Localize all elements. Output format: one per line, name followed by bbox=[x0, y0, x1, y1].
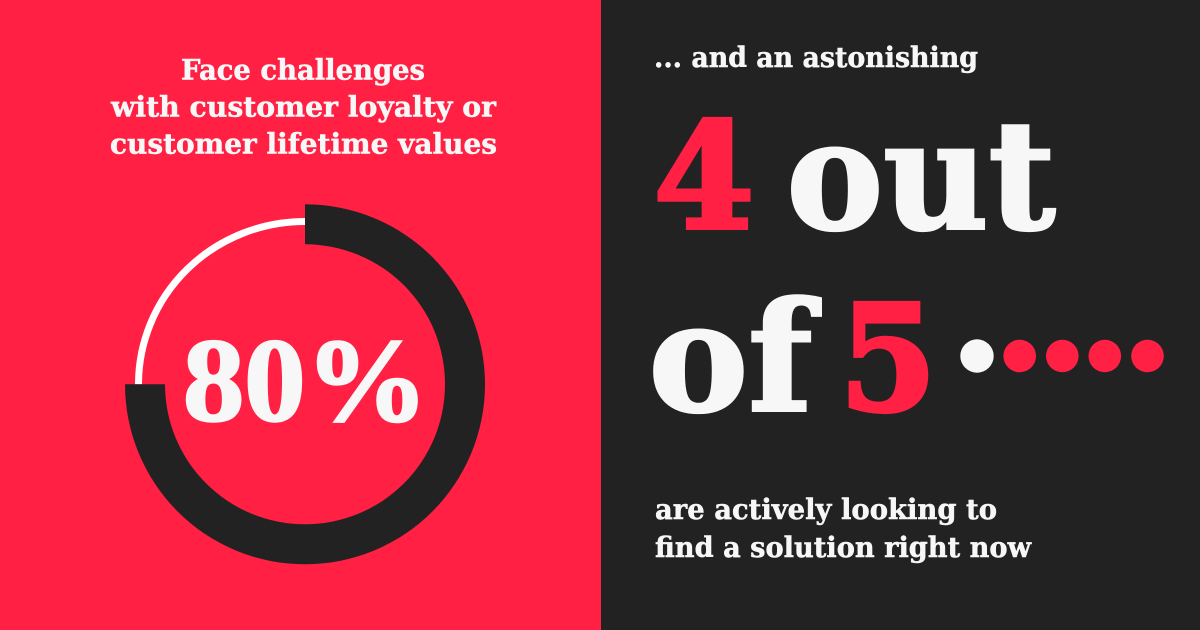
value: 80%: 80% bbox=[183, 314, 428, 446]
big statement: 4 out of 5 bbox=[648, 86, 1056, 446]
panel: right dark bbox=[601, 0, 1200, 630]
closing text bbox=[655, 493, 1032, 564]
heading: challenges: customer lifetime values bbox=[110, 128, 497, 160]
heading: challenges: with customer loyalty or bbox=[110, 90, 497, 124]
big statement: 4 out of 5: of bbox=[648, 268, 821, 446]
big statement: 4 out of 5: out bbox=[786, 86, 1056, 264]
big statement: 4 out of 5: 5 bbox=[839, 272, 937, 445]
panel: left red bbox=[0, 0, 601, 630]
heading: challenges bbox=[110, 54, 497, 160]
donut chart: 80 percent bbox=[125, 204, 485, 564]
closing text: are actively looking to bbox=[655, 493, 997, 526]
big statement: 4 out of 5: 4 bbox=[654, 90, 754, 263]
dots: one of five highlighted bbox=[960, 339, 1164, 373]
intro text: ... and an astonishing bbox=[654, 41, 978, 74]
heading: challenges: Face challenges bbox=[181, 54, 425, 86]
closing text: find a solution right now bbox=[655, 531, 1032, 564]
